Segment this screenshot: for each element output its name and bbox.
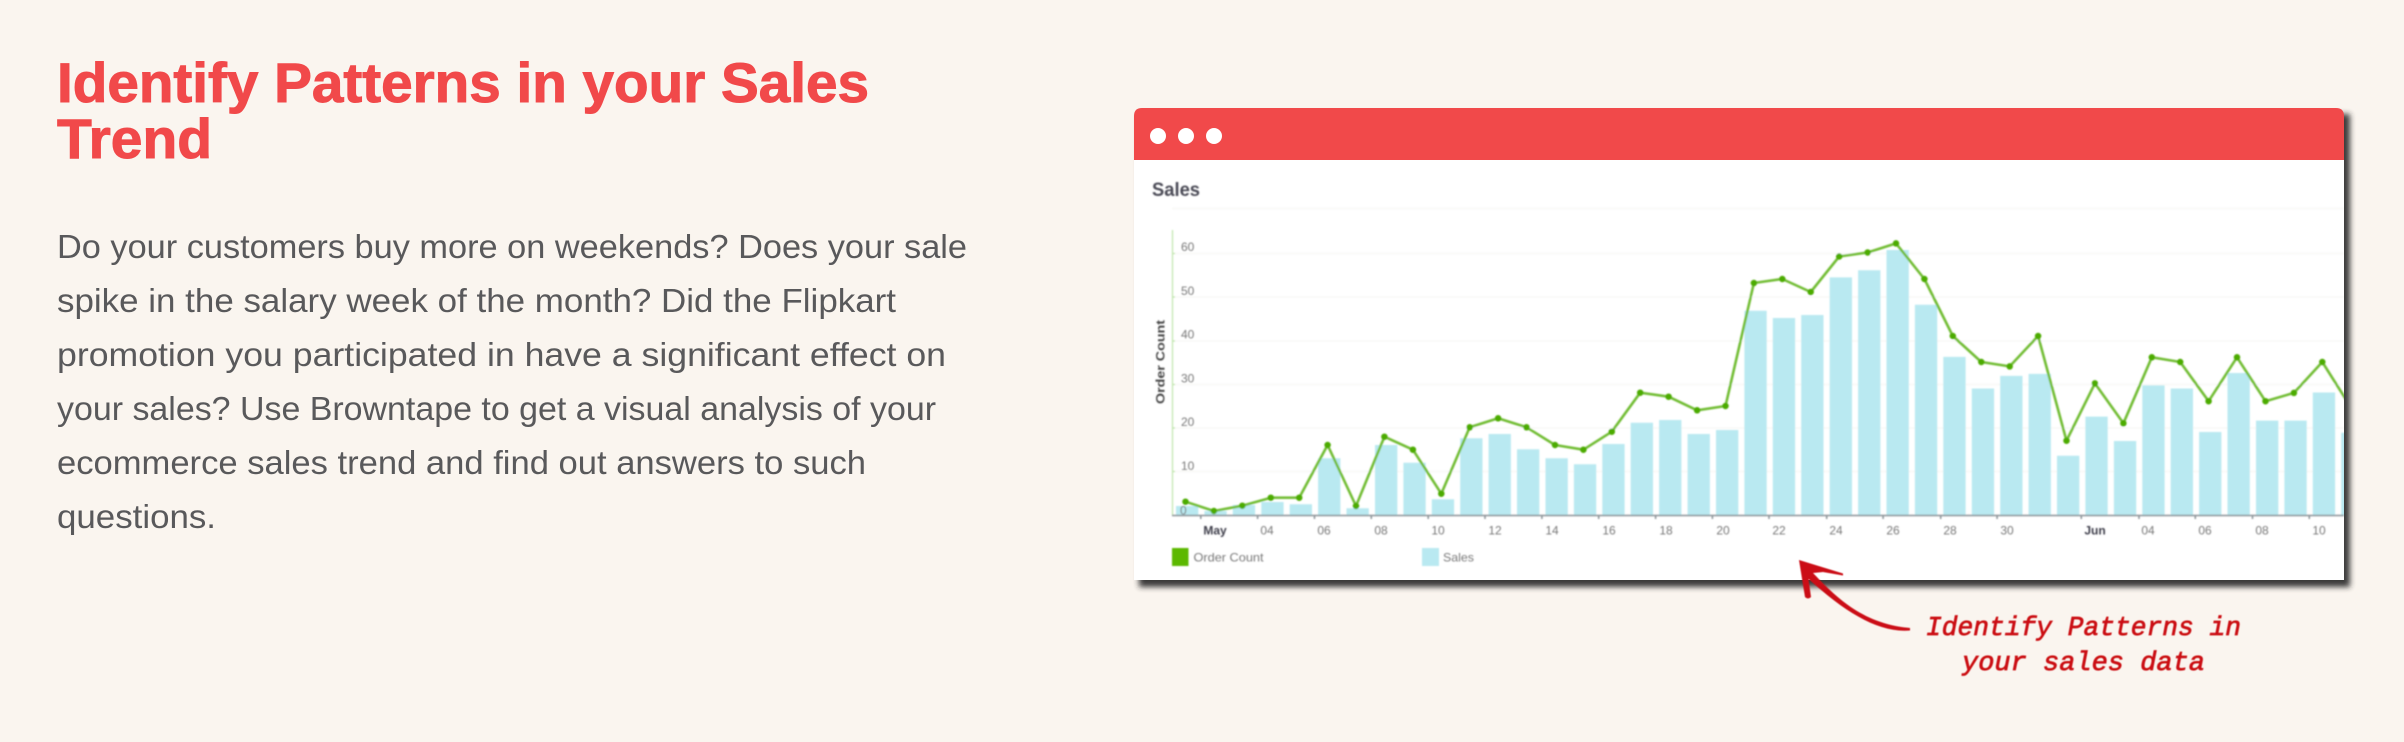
order count line bbox=[1186, 243, 2351, 511]
x axis labels: 08 bbox=[2255, 524, 2269, 538]
x axis labels: 04 bbox=[2141, 524, 2155, 538]
arrow: pointing at chart bbox=[1799, 560, 1910, 631]
title: Identify Patterns in your Sales bbox=[57, 51, 869, 114]
x axis labels: 24 bbox=[1829, 524, 1843, 538]
x axis labels: 22 bbox=[1772, 524, 1786, 538]
y axis labels: 30 bbox=[1181, 372, 1195, 386]
body text: spike in the salary week of the month? Did the Flipkart bbox=[57, 282, 896, 319]
chart axes bbox=[1172, 230, 1175, 515]
x axis labels: 10 bbox=[1431, 524, 1445, 538]
sales bars bbox=[1176, 250, 2364, 515]
body text: your sales? Use Browntape to get a visual analysis of your bbox=[57, 390, 936, 427]
x axis labels: 06 bbox=[1317, 524, 1331, 538]
chart heading: Sales bbox=[1152, 180, 1200, 201]
icon: window control dots bbox=[1150, 128, 1222, 144]
legend: Order Count bbox=[1194, 550, 1264, 564]
x axis labels: 30 bbox=[2000, 524, 2014, 538]
y axis labels: 60 bbox=[1181, 240, 1195, 254]
y axis labels: 10 bbox=[1181, 459, 1195, 473]
body text: promotion you participated in have a significant effect on bbox=[57, 336, 946, 373]
window title bar bbox=[1134, 108, 2344, 160]
handwritten callout: your sales data bbox=[1961, 649, 2205, 679]
legend: Sales bbox=[1443, 550, 1474, 564]
chart: order count and sales bbox=[1152, 180, 2364, 566]
legend bbox=[1172, 548, 1474, 566]
y axis labels: 0 bbox=[1180, 504, 1187, 518]
window shadow bbox=[1139, 114, 2350, 587]
body text: ecommerce sales trend and find out answers to such bbox=[57, 444, 866, 481]
x axis labels bbox=[1203, 524, 2326, 538]
x axis labels: 10 bbox=[2312, 524, 2326, 538]
window body bbox=[1134, 150, 2344, 580]
body text: questions. bbox=[57, 498, 216, 535]
panel: browser window with sales chart bbox=[1134, 108, 2364, 587]
title bbox=[57, 51, 869, 170]
x axis labels: 12 bbox=[1488, 524, 1502, 538]
y axis labels: 20 bbox=[1181, 415, 1195, 429]
x axis labels: Jun bbox=[2084, 524, 2106, 538]
x axis labels: 28 bbox=[1943, 524, 1957, 538]
handwritten callout: Identify Patterns in bbox=[1926, 614, 2241, 644]
x axis labels: 04 bbox=[1260, 524, 1274, 538]
body text: Do your customers buy more on weekends? Does your sale bbox=[57, 228, 967, 265]
x axis labels: 16 bbox=[1602, 524, 1616, 538]
x axis labels: 08 bbox=[1374, 524, 1388, 538]
y axis labels: 50 bbox=[1181, 284, 1195, 298]
x axis labels: 14 bbox=[1545, 524, 1559, 538]
handwritten callout bbox=[1926, 614, 2241, 679]
x axis labels: 26 bbox=[1886, 524, 1900, 538]
body text bbox=[57, 228, 967, 535]
x axis labels: 18 bbox=[1659, 524, 1673, 538]
x axis labels: May bbox=[1203, 524, 1227, 538]
y axis labels bbox=[1180, 240, 1195, 518]
order count points bbox=[1186, 243, 2322, 511]
x axis labels: 06 bbox=[2198, 524, 2212, 538]
y axis labels: 40 bbox=[1181, 328, 1195, 342]
title: Trend bbox=[57, 107, 212, 170]
x axis labels: 20 bbox=[1716, 524, 1730, 538]
y axis title: Order Count bbox=[1154, 320, 1168, 404]
